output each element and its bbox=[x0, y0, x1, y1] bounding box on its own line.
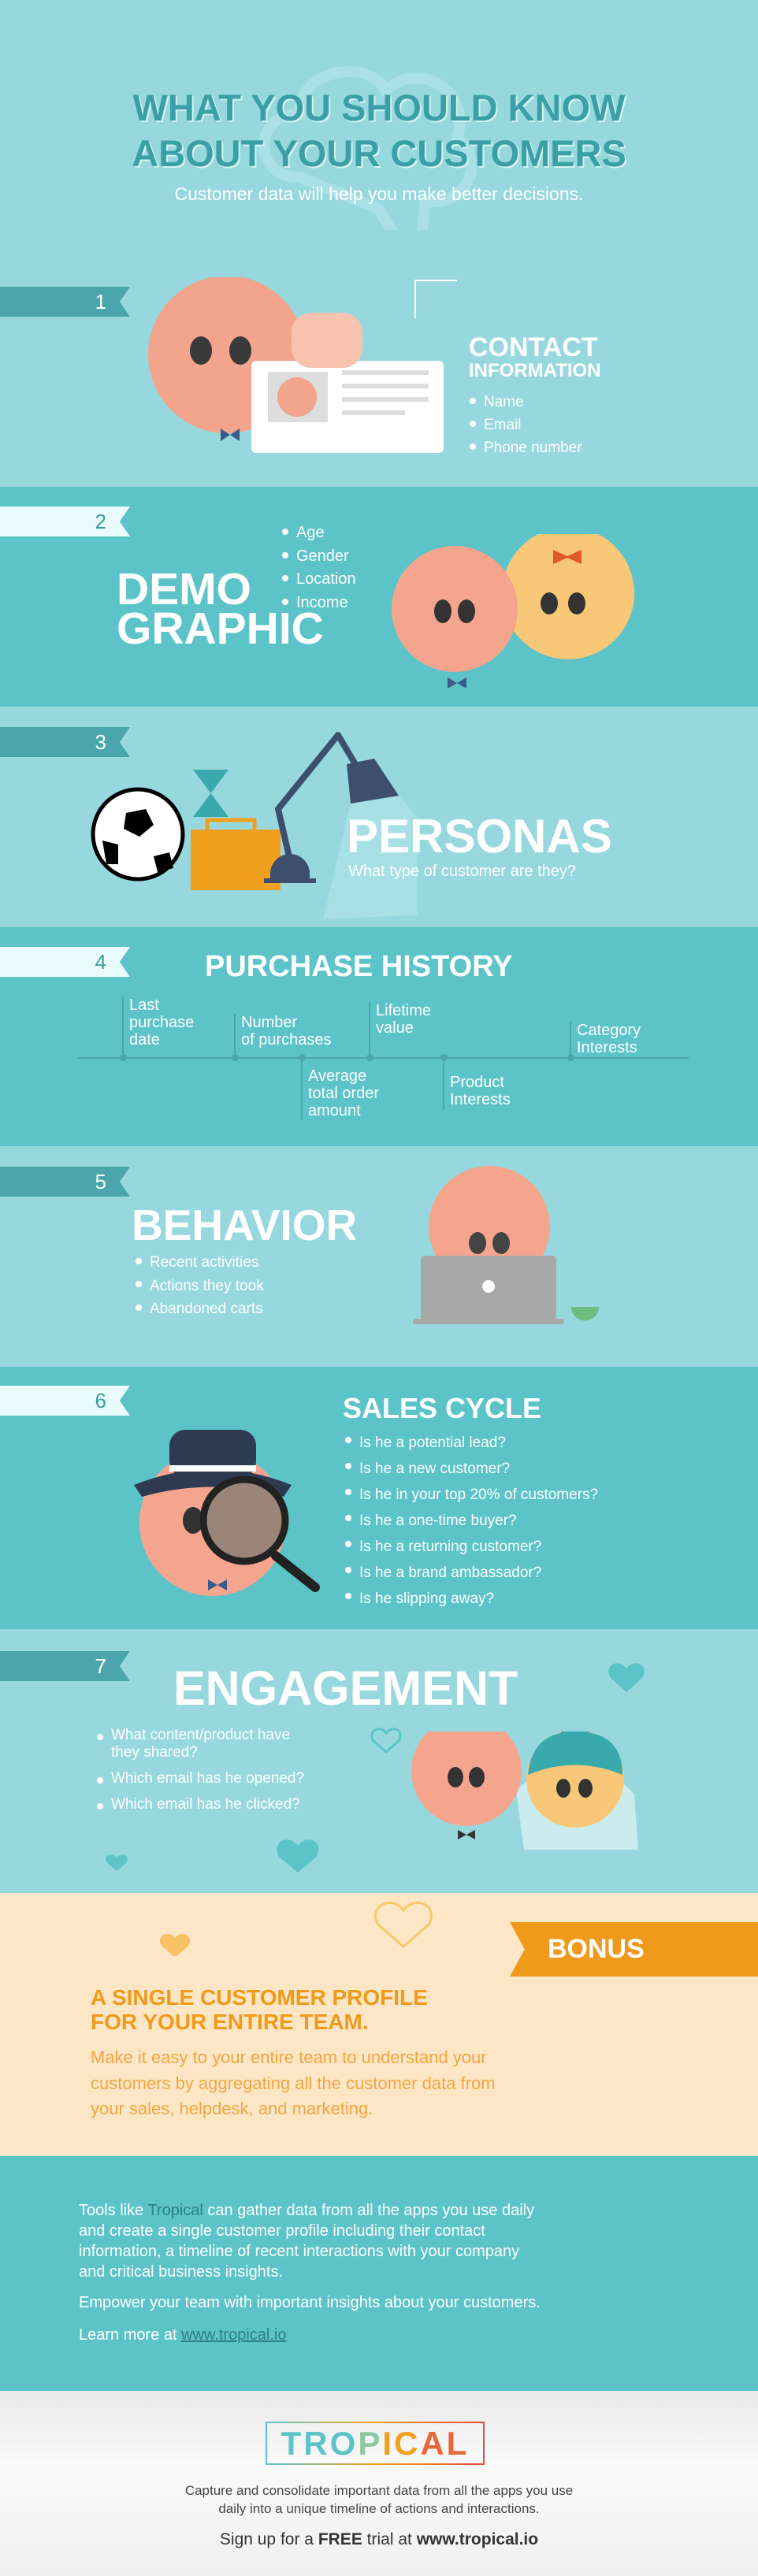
list: demographic: Age bbox=[296, 524, 325, 541]
list: sales cycle: Is he slipping away? bbox=[359, 1591, 494, 1607]
list: demographic bbox=[282, 524, 356, 611]
title bbox=[132, 87, 627, 174]
title: ABOUT YOUR CUSTOMERS bbox=[132, 132, 626, 174]
list: engagement bbox=[97, 1727, 304, 1813]
icon: face with laptop bbox=[413, 1166, 599, 1324]
timeline chart: amount bbox=[308, 1102, 361, 1119]
timeline chart: Product bbox=[450, 1074, 504, 1091]
panel: 5 behavior bbox=[0, 1166, 599, 1324]
ribbon 4 bbox=[0, 947, 130, 977]
bonus ribbon bbox=[510, 1922, 758, 1977]
panel: 3 personas bbox=[0, 727, 610, 919]
heading: personas: PERSONAS bbox=[347, 810, 612, 863]
ribbon 2 bbox=[0, 507, 130, 536]
list: demographic: Income bbox=[296, 594, 348, 611]
timeline chart: Category bbox=[577, 1022, 641, 1039]
heading: sales cycle: SALES CYCLE bbox=[343, 1392, 541, 1424]
text: empower: Empower your team with important insights about your customers. bbox=[79, 2294, 541, 2311]
footer bbox=[0, 2391, 758, 2576]
text: bonus body: Make it easy to your entire team to understand your bbox=[91, 2047, 487, 2067]
ribbon 5: 5 bbox=[95, 1170, 106, 1193]
icon: couple faces bbox=[411, 1732, 638, 1850]
text: bonus body: customers by aggregating all the customer data from bbox=[91, 2073, 496, 2092]
list: engagement: Which email has he clicked? bbox=[111, 1796, 300, 1813]
heading: bonus: A SINGLE CUSTOMER PROFILE bbox=[91, 1985, 428, 2010]
text: tools: Tools like Tropical can gather data from all the apps you use daily bbox=[79, 2202, 534, 2219]
text: learn more: Learn more at www.tropical.io bbox=[79, 2326, 286, 2344]
ribbon 6: 6 bbox=[95, 1389, 106, 1412]
list: demographic: Location bbox=[296, 570, 356, 588]
list: contact: Phone number bbox=[484, 440, 582, 456]
panel: bonus bbox=[0, 1893, 758, 2156]
text: bonus body: your sales, helpdesk, and marketing. bbox=[91, 2099, 373, 2118]
heading: contact: CONTACT bbox=[469, 332, 598, 362]
panel: 4 purchase history bbox=[0, 927, 758, 1146]
text: capture: Capture and consolidate important data from all the apps you use bbox=[185, 2483, 573, 2498]
ribbon 2: 2 bbox=[95, 510, 106, 533]
icon: face with card bbox=[148, 277, 457, 453]
heading: demographic bbox=[117, 564, 324, 654]
text: tools: information, a timeline of recent interactions with your company bbox=[79, 2243, 519, 2260]
ribbon 1: 1 bbox=[95, 290, 106, 314]
timeline chart: Interests bbox=[450, 1091, 511, 1108]
title: WHAT YOU SHOULD KNOW bbox=[133, 87, 625, 128]
bonus ribbon: BONUS bbox=[548, 1934, 645, 1964]
heading: demographic: GRAPHIC bbox=[117, 603, 324, 654]
timeline chart: Last bbox=[129, 997, 159, 1014]
list: sales cycle: Is he a brand ambassador? bbox=[359, 1565, 541, 1581]
timeline chart: date bbox=[129, 1031, 160, 1049]
panel: 1 contact information: INFORMATION bbox=[469, 360, 601, 381]
logo: tropical: TROPICAL bbox=[281, 2425, 469, 2462]
icon: objects and lamp bbox=[91, 732, 418, 919]
list: sales cycle: Is he a returning customer? bbox=[359, 1539, 541, 1555]
text: tools: and create a single customer profile including their contact bbox=[79, 2222, 485, 2240]
ribbon 3 bbox=[0, 727, 130, 757]
text: tools bbox=[79, 2202, 534, 2281]
panel: 2 demographic bbox=[0, 487, 758, 707]
icon: detective bbox=[134, 1430, 320, 1596]
ribbon 6 bbox=[0, 1386, 130, 1416]
timeline chart: purchase bbox=[129, 1014, 194, 1031]
list: sales cycle: Is he a potential lead? bbox=[359, 1435, 506, 1451]
decorative cloud logo bbox=[258, 66, 477, 230]
heading: demographic: DEMO bbox=[117, 564, 251, 614]
icon: hearts bbox=[159, 1902, 433, 1956]
timeline chart: total order bbox=[308, 1085, 379, 1102]
list: sales cycle: Is he a one-time buyer? bbox=[359, 1513, 517, 1529]
heading: bonus bbox=[91, 1985, 428, 2034]
list: contact: Name bbox=[484, 394, 524, 410]
timeline chart: Number bbox=[241, 1014, 297, 1031]
panel: 7 engagement bbox=[0, 1651, 645, 1873]
list: engagement: What content/product have bbox=[111, 1727, 290, 1743]
list: behavior: Recent activities bbox=[150, 1254, 258, 1271]
list: contact bbox=[470, 394, 582, 456]
heading: engagement: ENGAGEMENT bbox=[173, 1661, 518, 1715]
list: behavior: Actions they took bbox=[150, 1278, 264, 1294]
text: bonus body bbox=[91, 2047, 496, 2118]
heading: purchase history: PURCHASE HISTORY bbox=[205, 950, 513, 983]
ribbon 3: 3 bbox=[95, 730, 106, 754]
list: behavior: Abandoned carts bbox=[150, 1301, 263, 1317]
text: capture: daily into a unique timeline of actions and interactions. bbox=[218, 2501, 540, 2516]
ribbon 1 bbox=[0, 287, 130, 317]
heading: behavior: BEHAVIOR bbox=[132, 1201, 357, 1249]
timeline chart: of purchases bbox=[241, 1031, 332, 1049]
timeline chart: value bbox=[376, 1019, 414, 1037]
header bbox=[0, 0, 758, 230]
panel: 6 sales cycle bbox=[0, 1367, 758, 1629]
panel: 1 contact information bbox=[0, 277, 600, 453]
list: engagement: Which email has he opened? bbox=[111, 1770, 304, 1787]
subtitle: personas: What type of customer are they? bbox=[348, 863, 576, 880]
list: contact: Email bbox=[484, 417, 522, 433]
list: demographic: Gender bbox=[296, 547, 349, 564]
ribbon 7 bbox=[0, 1651, 130, 1681]
list: behavior bbox=[136, 1254, 264, 1317]
timeline chart: Interests bbox=[577, 1039, 637, 1056]
ribbon 7: 7 bbox=[95, 1654, 106, 1678]
list: engagement: they shared? bbox=[111, 1744, 198, 1761]
text: sign up: Sign up for a FREE trial at www.tropical.io bbox=[220, 2530, 538, 2548]
timeline chart: Lifetime bbox=[376, 1002, 431, 1019]
timeline chart: Average bbox=[308, 1067, 366, 1085]
panel: tools text bbox=[0, 2156, 758, 2391]
text: tools: and critical business insights. bbox=[79, 2263, 283, 2281]
icon: hearts bbox=[106, 1663, 645, 1873]
timeline chart bbox=[77, 997, 689, 1119]
list: sales cycle bbox=[345, 1435, 598, 1607]
heading: bonus: FOR YOUR ENTIRE TEAM. bbox=[91, 2010, 369, 2034]
list: sales cycle: Is he in your top 20% of customers? bbox=[359, 1487, 598, 1503]
text: capture bbox=[185, 2483, 573, 2516]
subtitle: Customer data will help you make better decisions. bbox=[174, 184, 584, 204]
ribbon 4: 4 bbox=[95, 950, 106, 974]
list: sales cycle: Is he a new customer? bbox=[359, 1461, 510, 1477]
ribbon 5 bbox=[0, 1167, 130, 1197]
icon: two faces bbox=[392, 534, 634, 689]
